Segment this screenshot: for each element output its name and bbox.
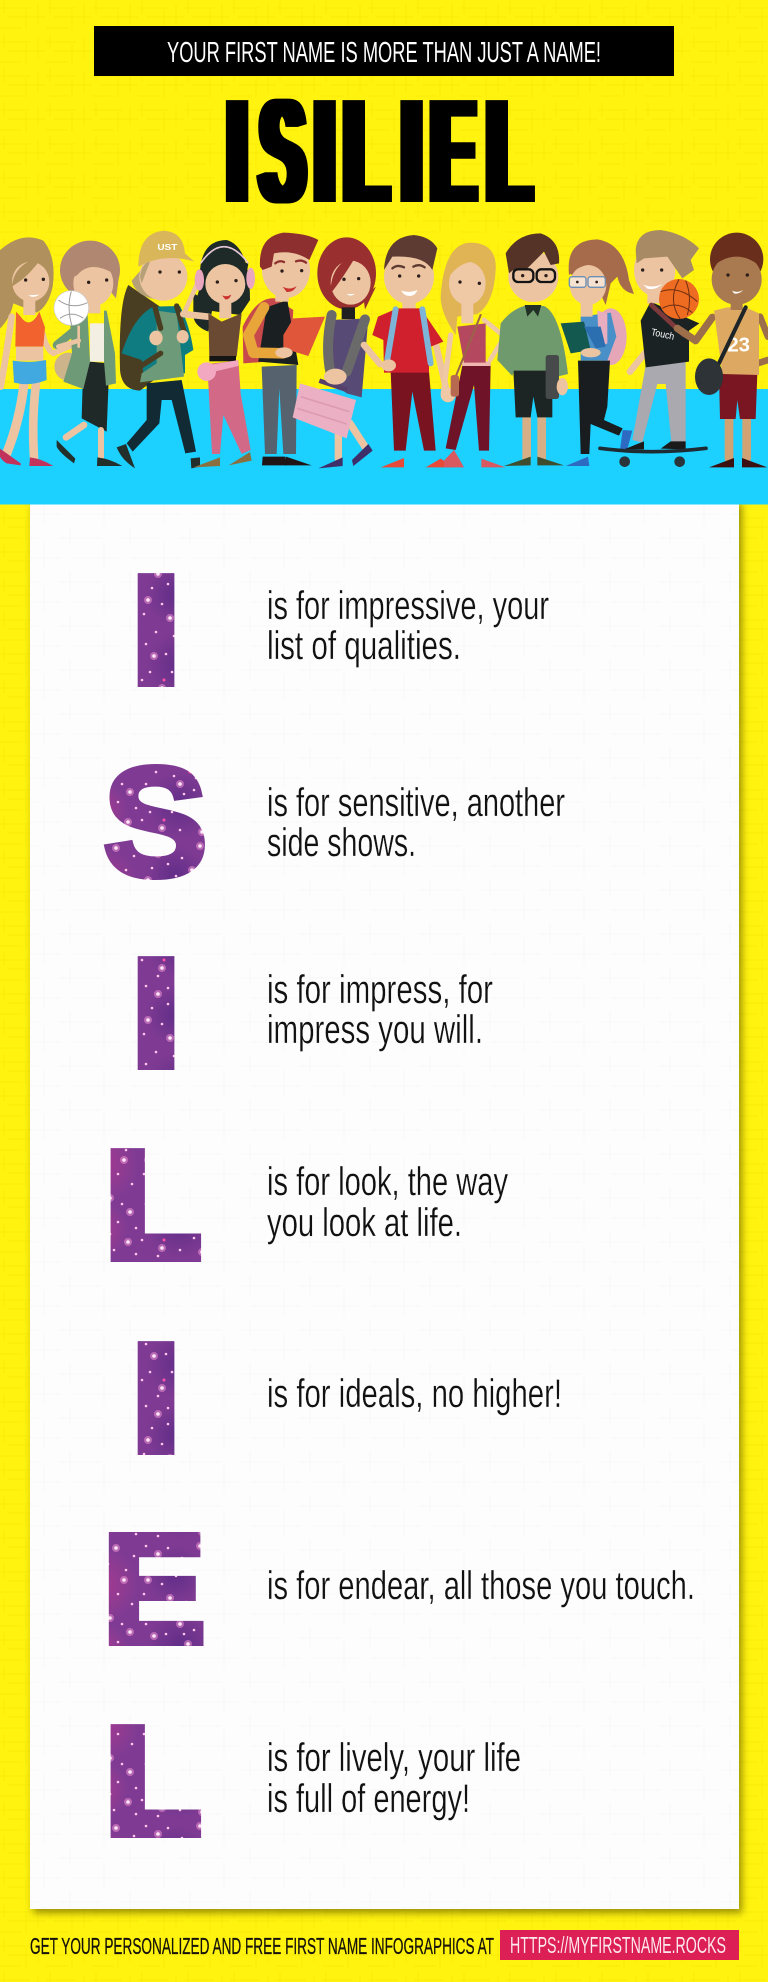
tagline banner [94,26,674,76]
character: boy on skateboard with basketball [600,230,706,467]
row: letter L: is for look, the way [267,1160,508,1204]
title: name: E [431,69,475,234]
row: letter L [107,1123,508,1288]
character: boy with glasses and green sweater [497,233,568,466]
title: name: L [344,69,388,234]
character: girl with pink headphones [183,240,255,467]
row: letter L [107,1699,521,1864]
row: letter S: is for sensitive, another [267,781,565,825]
illustration: group of students, right half [364,230,768,467]
title: name: I [314,69,335,234]
character: girl with volleyball and green jacket [54,241,122,466]
row: letter I: I [133,548,179,713]
row: letter E: E [102,1503,206,1675]
character: boy with red book [243,233,325,465]
illustration: group of students, left half [0,231,376,468]
title: name [227,69,531,234]
title: name: I [402,69,422,234]
blue floor band [0,389,768,504]
character: boy with cap and backpack: UST [157,242,178,252]
title: name: I [227,69,247,234]
character: boy with yellow tank top [677,233,768,467]
infographic: L [487,69,531,234]
character: girl with red hair and pink bag [293,237,376,468]
row: letter L: is for lively, your life [267,1736,521,1780]
row: letter I: I [133,931,179,1096]
row: letter L: L [107,1123,200,1288]
row: letter I: list of qualities. [267,624,461,668]
row: letter S: S [104,736,208,908]
character: boy with yellow tank top: 23 [727,334,750,357]
character: boy on skateboard with basketball: Touch [650,327,675,343]
character: boy with cap and backpack [117,231,200,468]
row: letter L: L [107,1699,200,1864]
character: blonde girl [441,243,506,467]
row: letter I [133,931,493,1096]
row: letter S [104,736,565,908]
row: letter I: is for impressive, your [267,584,549,628]
character: boy with red shirt [364,235,454,467]
white content panel [30,500,739,1909]
character: girl with orange top [0,237,77,466]
row: letter I [133,548,549,713]
row: letter I: I [133,1316,179,1481]
row: letter I: is for impress, for [267,968,493,1012]
character: girl with ponytail and tablet [561,239,634,466]
row: letter I: impress you will. [267,1008,483,1052]
row: letter L: is full of energy! [267,1777,470,1821]
row: letter I [133,1316,562,1481]
row: letter L: you look at life. [267,1201,462,1245]
title: name: S [260,69,305,234]
row: letter S: side shows. [267,821,416,865]
row: letter E [102,1503,695,1675]
row: letter I: is for ideals, no higher! [267,1372,562,1416]
